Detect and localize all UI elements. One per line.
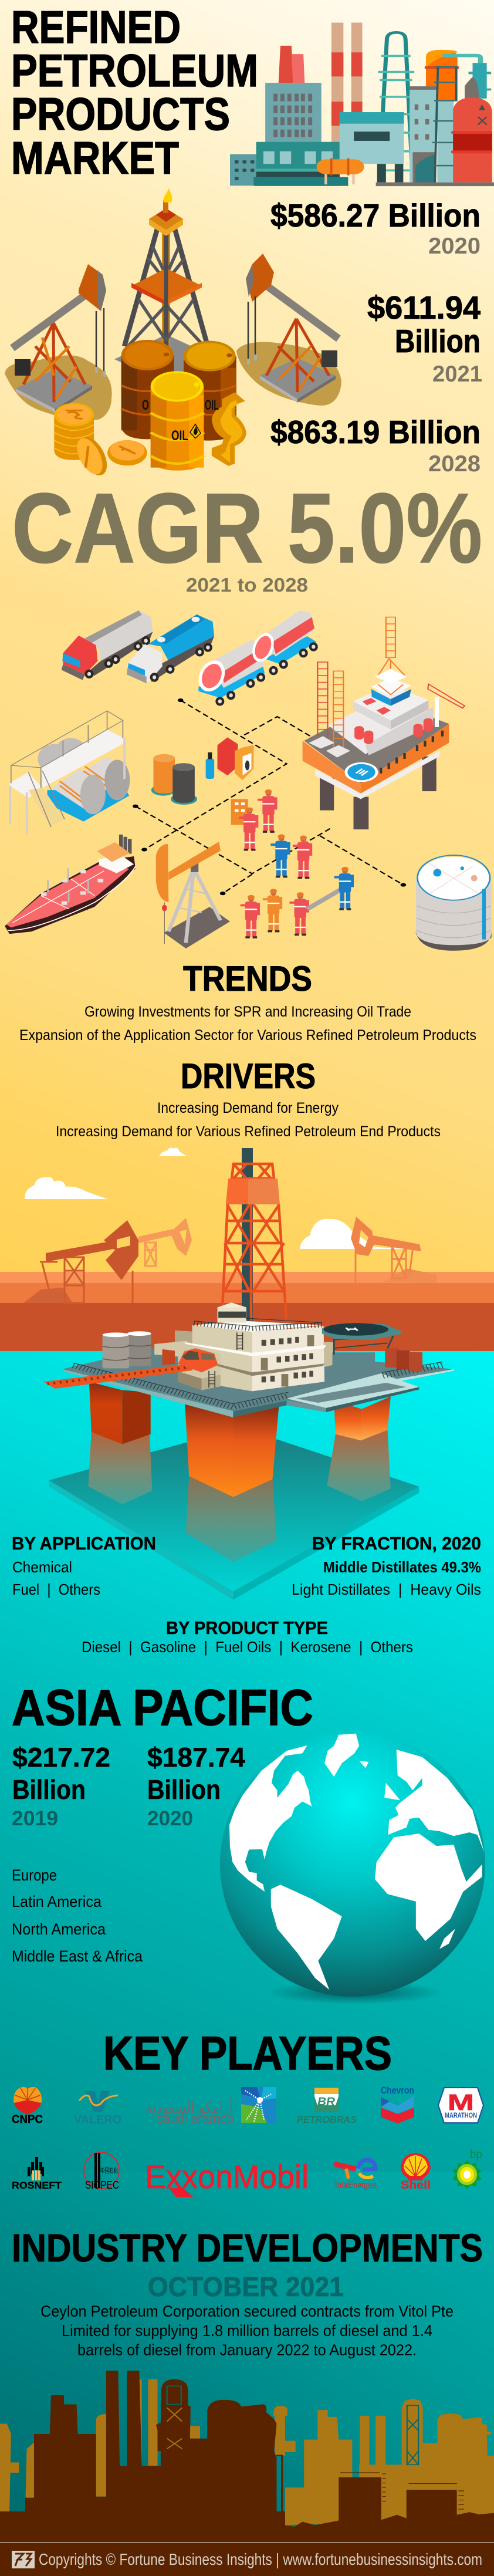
skyline: tower lattice details [167,2386,464,2538]
icon: workers group [231,789,354,938]
icon: clouds [25,1148,411,1249]
logo: ExxonMobil: ExxonMobil [145,2158,309,2195]
icon: left pump jack silhouette [23,1220,138,1303]
item: chemical: Chemical [12,1558,72,1576]
driver item 1: Increasing Demand for Energy [157,1100,339,1116]
market size 2020: $586.27 Billion [270,197,481,234]
icon: left pump jack [5,264,112,420]
list: other regions: North America [12,1920,106,1938]
stat: 2020 value: 2020 [147,1807,193,1830]
dashed connectors [133,698,406,895]
market size 2021: Billion [395,323,481,359]
text: oil labels on barrels: O [142,397,149,413]
icon: red barrels [385,1348,422,1372]
icon: derrick tower [222,1148,286,1324]
heading: asia pacific: ASIA PACIFIC [12,1680,313,1736]
year 2020: 2020 [428,234,481,259]
heading: by fraction: BY FRACTION, 2020 [312,1533,481,1554]
icon: gray tanks [103,1331,151,1368]
platform deck [62,1348,454,1417]
list: other regions: Middle East & Africa [12,1947,143,1965]
items: product types: Diesel | Gasoline | Fuel Oils | Kerosene | Others [82,1638,413,1656]
icon: rail tank wagons [195,610,318,706]
icon: oil barrels and fuel cans [151,737,253,805]
logo: Sinopec [84,2152,119,2191]
title: PRODUCTS [11,88,230,140]
icon: right pump jack [236,254,341,406]
development description: barrels of diesel from January 2022 to August 2022. [77,2341,417,2359]
development description: Ceylon Petroleum Corporation secured contracts from Vitol Pte [40,2302,454,2320]
list: other regions [12,1866,143,1965]
icon: barrels, dollar sign and coins [54,340,246,477]
text: oil labels on barrels: OIL [205,397,219,413]
date: october 2021: OCTOBER 2021 [148,2271,344,2302]
development description [40,2302,454,2359]
skyline: dark layer [0,2371,494,2576]
CAGR period: 2021 to 2028 [186,574,308,596]
logo: Marathon: M [448,2091,474,2115]
logo: Saudi Aramco: أرامكو السعودية [146,2096,233,2117]
stat: 2019 value: 2019 [12,1807,58,1830]
background: sky gradient [0,0,494,1362]
logo: Rosneft: ROSNEFT [12,2180,62,2191]
logo: Sinopec: 中国石化 [100,2166,118,2175]
icon: oil tanker ship [5,835,136,934]
panel: by product type [82,1618,413,1656]
trend item 1: Growing Investments for SPR and Increasing Oil Trade [84,1004,411,1020]
footer [0,2542,494,2576]
icon: refinery illustration [230,23,494,186]
development description: Limited for supplying 1.8 million barrels of diesel and 1.4 [62,2322,432,2339]
logo: Saudi Aramco: saudi aramco [157,2111,234,2126]
stat: 2020 value: $187.74 [147,1742,245,1773]
icon: central oil derrick [114,188,220,384]
items: light distillates and heavy oils: Light Distillates | Heavy Oils [292,1581,481,1598]
panel: by application [12,1533,156,1598]
logo: Shell: Shell [401,2179,431,2192]
oil supply chain illustration [5,610,492,951]
stat: 2020 value [147,1742,245,1830]
title: REFINED [11,1,181,53]
items: fuel and others: Fuel | Others [12,1581,100,1598]
icon: pump jack [156,842,230,948]
icon: offshore rig [303,617,465,829]
year 2028: 2028 [428,451,481,477]
text: oil labels on barrels [142,397,219,444]
pillars [88,1382,391,1562]
icon: orange crane [43,1348,218,1389]
logo: CNPC [12,2087,43,2126]
logo: Shell [401,2153,431,2192]
logo: Petrobras: BR [317,2096,335,2108]
illustration: refinery skyline silhouette [0,2371,494,2576]
logo: Sinopec: SIOPEC [85,2179,119,2191]
icon: offshore platform [43,1148,454,1600]
market size 2021: $611.94 [367,289,481,326]
logo: Chevron: Chevron [381,2085,414,2096]
icon: Fortune Business Insights logo [12,2551,35,2568]
stat: 2019 value: $217.72 [12,1742,110,1773]
icon: silver fuel truck [62,610,153,680]
stat: 2019 value [12,1742,110,1830]
logo: Marathon: MARATHON [445,2111,477,2119]
heading: by application: BY APPLICATION [12,1533,156,1554]
icon: oil field with derrick, pump jacks, barrels and coins [5,188,341,477]
logo: Petrobras [297,2088,357,2125]
icon: blue fuel truck [127,615,214,683]
icon: storage tanks on scaffold [9,711,130,834]
skyline: light layer [0,2379,494,2525]
market size 2028: $863.19 Billion [270,414,481,450]
list: other regions: Latin America [12,1893,102,1910]
stat: 2020 value: Billion [147,1774,221,1805]
logo: Valero [74,2091,121,2126]
icon: background pump jack far left [138,1218,192,1266]
stat: 2019 value: Billion [12,1774,86,1805]
scene: sunset horizon with clouds and pump jacks [0,1148,494,1356]
logo: BP [452,2148,482,2189]
logo: Rosneft [12,2157,62,2191]
sea reflection [49,1439,419,1600]
panel: company logos [12,2085,483,2197]
heading: key players: KEY PLAYERS [103,2027,392,2080]
panel: by fraction [292,1533,481,1598]
logo: Petrobras: PETROBRAS [297,2114,357,2125]
title: PETROLEUM [11,45,258,96]
item: middle distillates share: Middle Distillates 49.3% [323,1558,481,1576]
icon: right pump jack silhouette [351,1217,437,1283]
icon: helipad [322,1323,402,1367]
logo: Valero: VALERO [74,2114,121,2126]
title [11,1,258,184]
heading: by product type: BY PRODUCT TYPE [166,1618,328,1638]
logo: Marathon [438,2088,483,2123]
text: oil labels on barrels: OIL [171,428,188,444]
logo: TotalEnergies [334,2160,377,2190]
logo: Chevron [381,2085,414,2123]
logo: CNPC: CNPC [12,2114,43,2126]
icon: accommodation block [154,1302,334,1391]
horizon bands [0,1272,494,1356]
year 2021: 2021 [432,362,482,387]
list: other regions: Europe [12,1866,57,1884]
background: sea gradient [0,1351,494,2548]
logo: BP: bp [470,2148,482,2161]
heading: trends: TRENDS [183,959,312,998]
driver item 2: Increasing Demand for Various Refined Petroleum End Products [56,1123,441,1140]
logo: Saudi Aramco [146,2087,276,2126]
icon: storage silo [416,855,492,951]
logo: TotalEnergies: TotalEnergies [334,2180,377,2190]
heading: drivers: DRIVERS [181,1056,316,1096]
market size 2021 [367,289,481,359]
icon: globe [220,1731,485,2004]
title: MARKET [11,132,179,184]
